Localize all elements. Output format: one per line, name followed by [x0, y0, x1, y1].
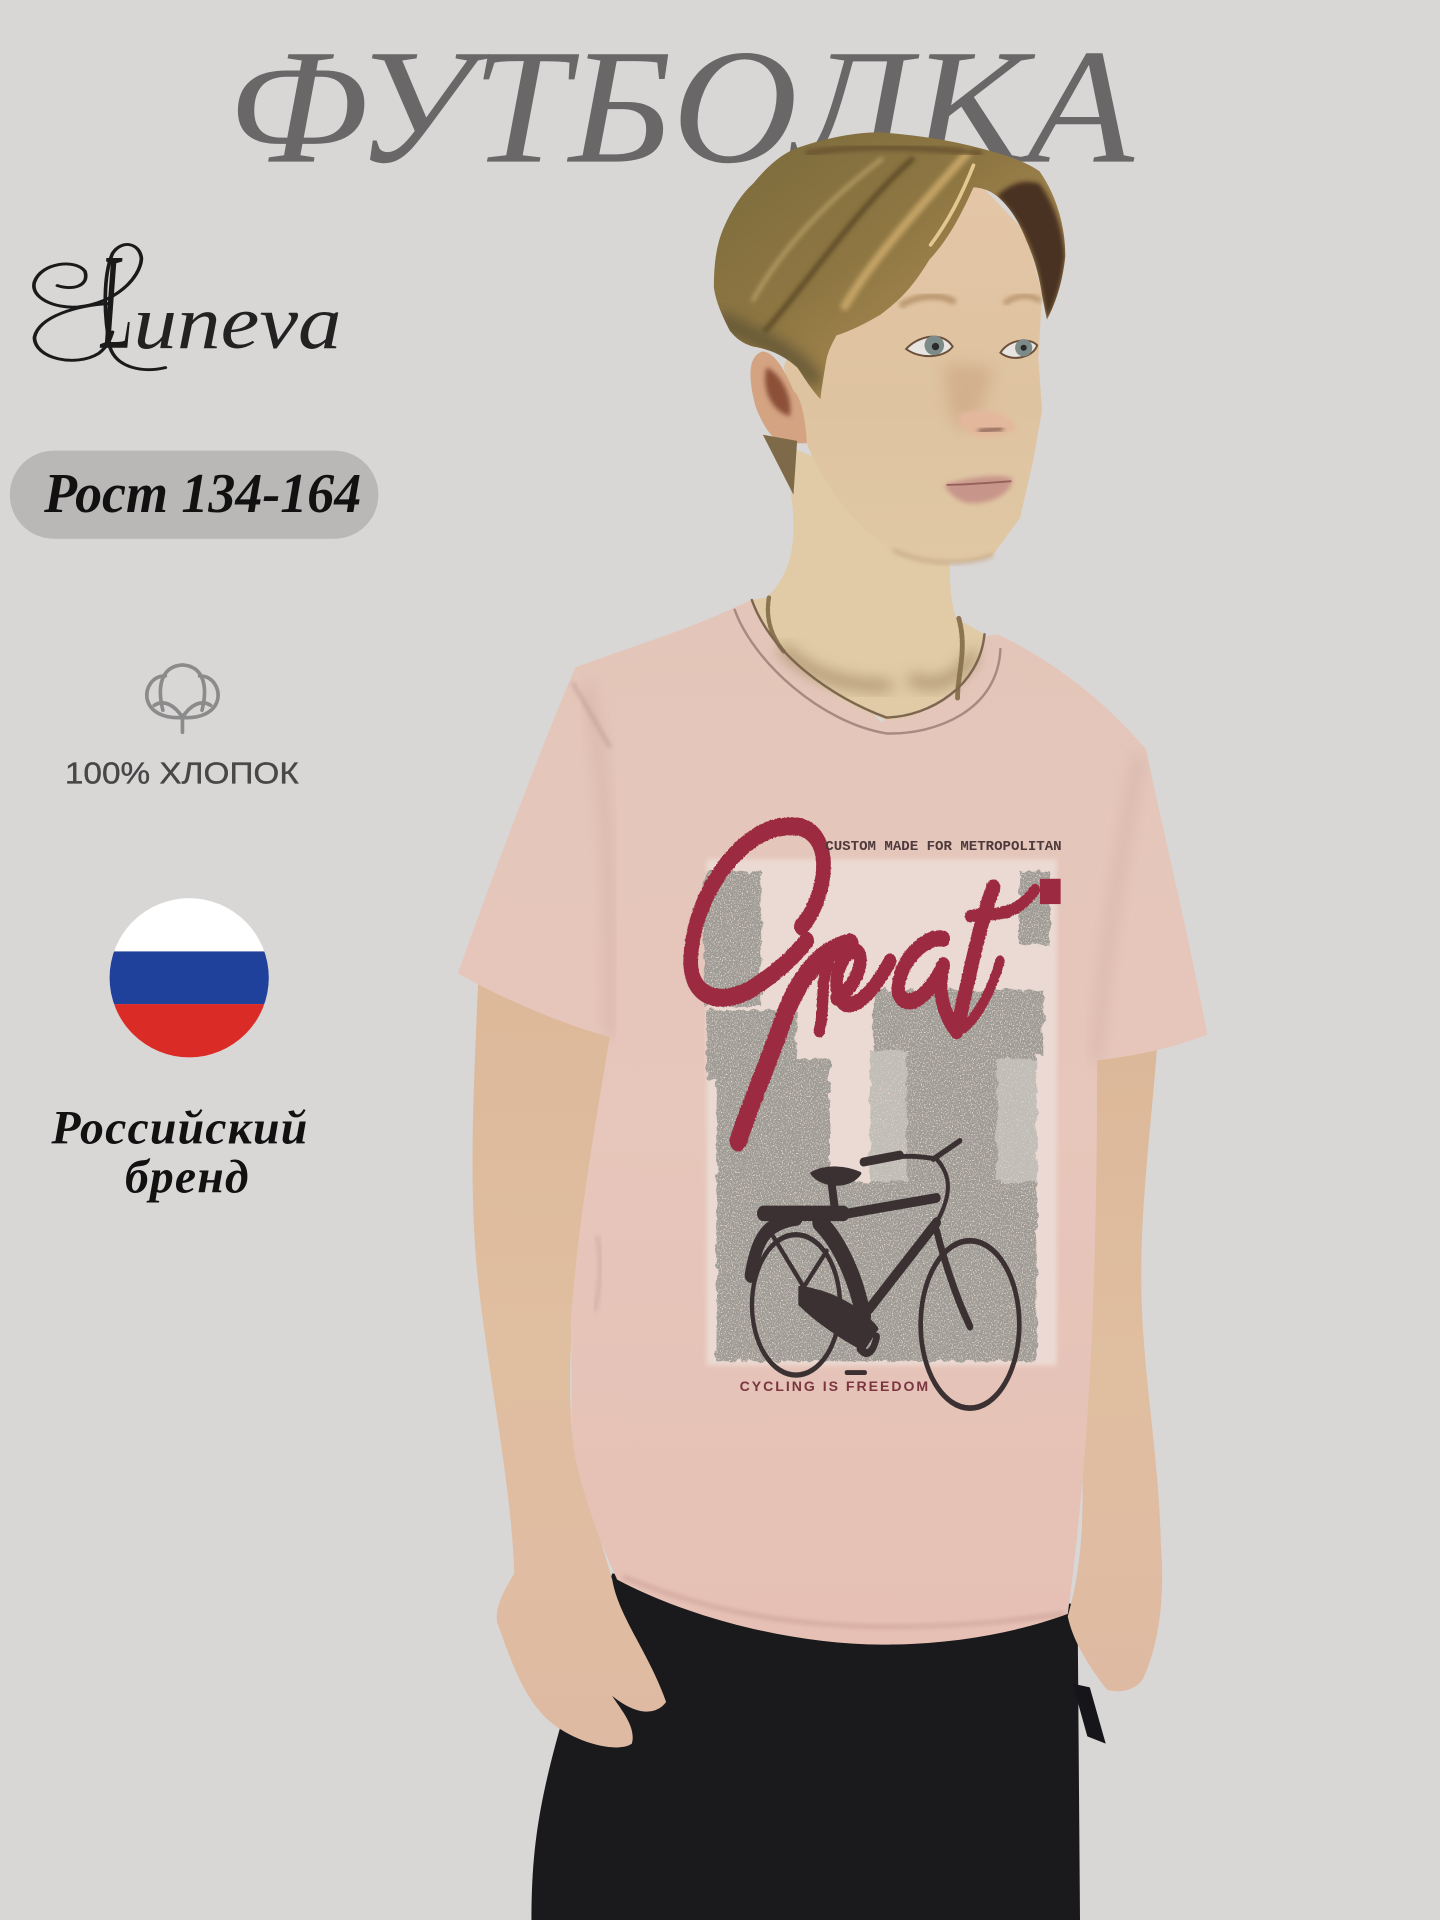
- Great lettering: [691, 826, 1035, 1141]
- nose shading and eyes and mouth: [893, 296, 1041, 562]
- left arm and hand: [473, 943, 666, 1747]
- collar shadow and necklace: [735, 598, 1000, 734]
- shirt fold shading: [573, 683, 1139, 1627]
- model wearing t-shirt: [458, 132, 1207, 1920]
- brand origin text: [50, 1102, 307, 1204]
- shirt print: [691, 826, 1061, 1408]
- print slogan bottom: CYCLING IS FREEDOM: [740, 1378, 928, 1394]
- icon: cotton boll: [147, 665, 218, 732]
- face: [784, 178, 1042, 562]
- bicycle: [751, 1141, 1019, 1408]
- neck: [752, 447, 984, 720]
- print slogan top: CUSTOM MADE FOR METROPOLITAN: [825, 839, 1062, 855]
- flag block of lettering: [1040, 879, 1061, 904]
- black trousers: [531, 1573, 1106, 1920]
- icon: Russian flag: [110, 898, 269, 1058]
- brand logo: uneva: [133, 281, 342, 365]
- brand origin text: Российский: [50, 1102, 307, 1155]
- grey photo panel: [703, 859, 1057, 1365]
- t-shirt: [458, 600, 1207, 1645]
- right arm and hand: [1068, 1041, 1162, 1691]
- cotton label: 100% ХЛОПОК: [65, 757, 299, 791]
- height range pill: Рост 134-164: [43, 463, 361, 525]
- hair: [714, 132, 1065, 495]
- ear: [751, 351, 807, 443]
- brand logo: L: [99, 225, 132, 378]
- brand logo: [34, 225, 342, 378]
- brand origin text: бренд: [125, 1151, 249, 1204]
- height range pill: [10, 451, 378, 539]
- title: ФУТБОЛКА: [228, 17, 1135, 198]
